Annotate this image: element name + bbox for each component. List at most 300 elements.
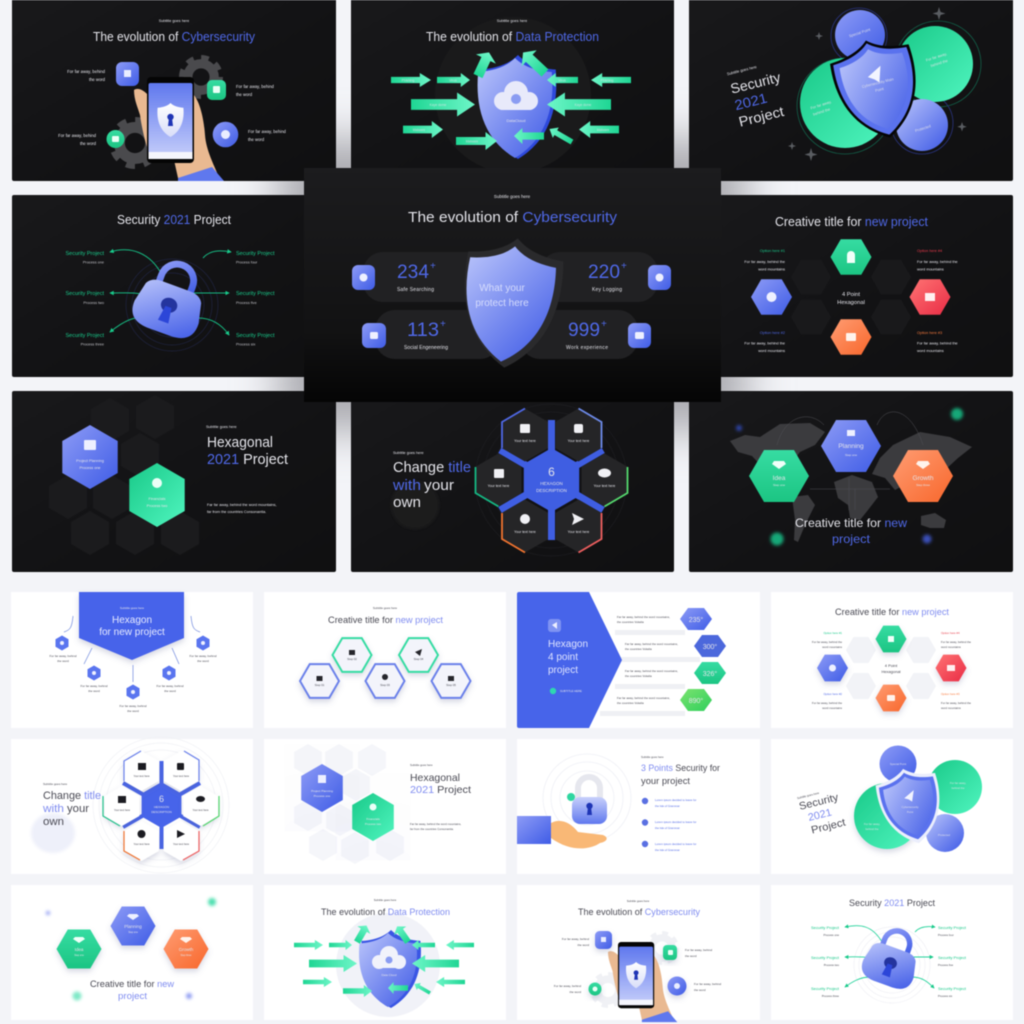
outlined hexagons <box>300 638 470 698</box>
row text: the countries Vokalia <box>625 674 652 678</box>
arrow labels: Malware <box>597 128 609 132</box>
icon: green circle <box>588 982 602 996</box>
stat: social engineering <box>362 319 448 351</box>
subtitle: Subtitle goes here <box>627 899 650 903</box>
bullet text: Lorem ipsum decided to leave for <box>655 798 696 802</box>
hexagon: project planning: Project Planning <box>76 459 104 463</box>
hexagon: idea: Step one <box>773 483 785 487</box>
circle labels: Point <box>875 87 885 93</box>
rotated heading: 2021 <box>807 806 833 824</box>
icon: gears <box>113 58 220 165</box>
center hub <box>500 420 603 540</box>
title: with <box>392 477 421 494</box>
shield <box>478 55 556 159</box>
captions <box>554 937 721 994</box>
title: Change title <box>43 790 101 802</box>
hex: top right: Your text here <box>568 439 589 443</box>
title: 2021 Project <box>207 451 290 468</box>
arrows right <box>388 940 474 994</box>
subtitle: Subtitle goes here <box>206 425 237 429</box>
icon: blue badge <box>595 931 612 949</box>
subtitle: Subtitle goes here <box>641 755 664 759</box>
row text: the countries Vokalia <box>617 701 644 705</box>
hexagon: financials <box>129 463 185 527</box>
labels left: Security Project <box>65 333 104 339</box>
center label: Hexagonal <box>881 669 901 674</box>
hexagon green <box>830 239 872 275</box>
glowing dots <box>736 408 963 546</box>
captions: the word <box>127 709 139 713</box>
option captions: For far away, behind the <box>812 640 842 644</box>
labels left: Security Project <box>65 291 104 297</box>
circle labels: For far away, <box>950 781 966 785</box>
illustration: padlock <box>127 254 216 344</box>
hexagon: planning: Step one <box>845 453 857 457</box>
sublabels left: Process three <box>81 342 104 346</box>
hex: bottom right: Your text here <box>568 530 589 534</box>
option 4: word mountains <box>917 268 944 272</box>
blue arrow panel: project <box>548 665 578 676</box>
title: Hexagonal <box>207 434 273 451</box>
hexagon stat 300 <box>694 635 726 657</box>
center label: 4 Point <box>885 663 898 668</box>
row text: Far far away, behind the word mountains, <box>625 642 678 646</box>
subtitle: Subtitle goes here <box>393 451 424 455</box>
background hexagons <box>294 744 404 864</box>
option 3: Option here #3 <box>917 331 942 335</box>
option 4: For far away, behind the <box>917 260 958 264</box>
hexagon: planning <box>821 420 881 472</box>
panel: dark padlock slide <box>12 195 312 377</box>
panel: light five hexagon row <box>264 592 506 728</box>
title: project <box>832 532 871 546</box>
hexagon stat 300: 300° <box>703 643 717 651</box>
center label: Hexagonal <box>837 300 865 306</box>
green circle right <box>928 760 982 814</box>
blue arrow panel: 4 point <box>548 652 578 663</box>
bullet text: the Isle of Grammar <box>655 826 680 830</box>
title: 3 Points Security for <box>641 763 721 773</box>
blue circle top <box>880 746 916 782</box>
circle labels <box>810 27 948 133</box>
hexagon: idea <box>56 930 102 968</box>
rotated heading: Subtitle goes here <box>727 65 757 76</box>
row text <box>617 615 678 705</box>
icon: green badge <box>207 80 226 100</box>
caption left bottom: For far away, behind <box>58 133 97 138</box>
circle labels: For far away, <box>925 52 947 63</box>
arrows: pointing in from left <box>391 73 497 150</box>
hexagon stat 235: 235° <box>689 616 703 624</box>
hexagon orange <box>830 319 872 355</box>
icon: blue circle <box>668 976 686 996</box>
panel: light six hexagon slide <box>11 737 253 874</box>
option 1: For far away, behind the <box>744 260 785 264</box>
sublabels right: Process four <box>938 933 954 937</box>
central shield <box>873 762 949 850</box>
subtitle: Subtitle goes here <box>159 19 189 23</box>
captions: the word <box>197 659 209 663</box>
icon: smile circle <box>213 122 238 147</box>
labels left <box>65 251 104 339</box>
subtitle: Subtitle goes here <box>497 19 527 23</box>
hexagon labels: Your text here <box>114 808 131 812</box>
center hub: HEXAGON <box>154 805 169 809</box>
center label: 4 Point <box>842 292 860 298</box>
bullet text: Lorem ipsum decided to leave for <box>655 820 696 824</box>
caption left top: For far away, behind <box>67 69 106 74</box>
captions: the word <box>577 943 589 947</box>
rotated heading <box>797 786 847 838</box>
hexagon orange <box>876 685 906 711</box>
circle labels: behind the <box>813 107 831 117</box>
panel: dark 4 point hexagonal slide <box>712 195 1013 377</box>
illustration: hand holding phone <box>134 77 224 181</box>
caption right top: the word <box>236 92 253 97</box>
option 1: Option here #1 <box>760 249 785 253</box>
blue arrow panel: Hexagon <box>548 639 588 650</box>
labels right: Security Project <box>236 333 275 339</box>
blue pentagon header <box>79 592 184 660</box>
body text: far from the countries Consonantia. <box>207 510 266 514</box>
labels right: Security Project <box>236 291 275 297</box>
blue arrow panel: SUBTITLE HERE <box>560 689 582 693</box>
title: The evolution of Cybersecurity <box>408 209 618 226</box>
shield: protect here <box>475 298 529 309</box>
hexagon: project planning <box>301 764 343 812</box>
sublabels left <box>81 260 104 346</box>
labels left: Security Project <box>811 986 840 991</box>
title: your <box>67 803 89 815</box>
hexagon: financials: Financials <box>148 497 166 501</box>
circle labels: For far away, <box>864 822 880 826</box>
icon: cloud with lock <box>372 946 406 969</box>
captions: For far away, behind <box>554 984 581 988</box>
rotated heading: Project <box>737 103 786 130</box>
stat: key logging: + <box>621 261 627 272</box>
green circle left <box>800 58 890 148</box>
caption right bottom: For far away, behind <box>248 129 287 134</box>
hexagon labels: Step 01 <box>315 683 325 687</box>
panel: dark featured slide <box>304 168 721 402</box>
green circle left <box>854 783 920 849</box>
hexagon stat 326: 326° <box>703 670 717 678</box>
panel: dark world map slide <box>689 391 1013 572</box>
subtitle: Subtitle goes here <box>43 782 68 786</box>
sublabels left <box>822 933 839 998</box>
hexagon blue <box>751 279 792 315</box>
hex: bottom left <box>502 500 548 552</box>
arrows diagonal <box>351 922 432 996</box>
arrow labels: Virus <box>449 78 457 82</box>
center hub: DESCRIPTION <box>151 810 172 814</box>
sublabels left: Process two <box>824 963 839 967</box>
arrow labels: Kaye dome <box>430 103 447 107</box>
stat: safe searching: 234 <box>397 262 429 283</box>
panel: dark data protection slide <box>351 0 674 181</box>
arrows left <box>294 940 372 997</box>
circle labels: For far away, <box>810 100 832 110</box>
rotated heading: Project <box>810 816 847 837</box>
blue arrow panel <box>517 592 622 728</box>
title: Hexagonal <box>410 772 460 784</box>
hexagon: idea: Step one <box>74 954 84 957</box>
title: with <box>42 803 64 815</box>
hexagon: project planning: Process one <box>79 466 101 470</box>
sublabels left: Process one <box>83 260 104 264</box>
illustration: padlock <box>567 777 607 824</box>
hexagon: planning: Planning <box>838 443 864 450</box>
panel: dark security circles slide <box>689 0 1013 181</box>
title: Creative title for new <box>90 979 174 989</box>
stat: safe searching: Safe Searching <box>397 287 434 293</box>
hexagon stat 326 <box>694 662 726 684</box>
sublabels right <box>938 933 954 998</box>
circle labels: Cybersecurity Main <box>862 77 894 89</box>
shield: What your <box>479 283 525 294</box>
captions: For far away, behind <box>119 704 147 708</box>
hexagon labels: Your text here <box>192 808 209 812</box>
hex: bottom right <box>556 500 602 552</box>
option captions: word mountains <box>941 645 961 649</box>
row text: Far far away, behind the word mountains, <box>617 615 670 619</box>
circle labels: Protected <box>938 833 950 837</box>
panel: dark hexagonal 2021 slide <box>12 391 336 572</box>
hexagon labels: Your text here <box>133 774 150 778</box>
stat: key logging: Key Logging <box>592 287 622 293</box>
title: own <box>393 494 421 511</box>
stat: work experience: 999 <box>568 320 600 341</box>
hexagon labels: Your text here <box>173 774 190 778</box>
title: own <box>43 816 64 828</box>
title: project <box>118 991 148 1001</box>
circle labels: Special Point <box>849 27 872 38</box>
bullet text <box>655 798 696 852</box>
bullet text: the Isle of Grammar <box>655 804 680 808</box>
hexagon red <box>936 655 966 681</box>
hexagon: idea <box>749 450 809 502</box>
outer hexagons <box>105 751 218 861</box>
stat pills <box>363 252 658 359</box>
central shield <box>826 31 930 147</box>
title: The evolution of Data Protection <box>426 30 599 44</box>
hexagon stat 890 <box>680 689 712 711</box>
sublabels right: Process six <box>236 342 256 346</box>
hexagon labels: Your text here <box>133 842 150 846</box>
hexagon: growth: Growth <box>179 947 194 952</box>
hex: top left <box>502 408 548 462</box>
hexagon stat 890: 890° <box>689 697 703 705</box>
blue pentagon header: for new project <box>99 627 165 638</box>
captions <box>49 654 217 713</box>
panel: light 4 point project <box>517 592 760 728</box>
captions: the word <box>694 988 706 992</box>
row text: Far far away, behind the word mountains, <box>617 696 670 700</box>
circle labels: behind the <box>865 827 879 831</box>
hexagon: financials <box>352 793 394 841</box>
panel: light creative title map slide <box>11 885 253 1020</box>
rotated heading: Subtitle goes here <box>797 791 820 800</box>
labels left: Security Project <box>811 925 840 930</box>
hexagon: planning <box>110 907 156 945</box>
bullet text: the Isle of Grammar <box>655 848 680 852</box>
title: your project <box>641 776 691 786</box>
option 4: Option here #4 <box>917 249 942 253</box>
panel: light 4 point hexagonal <box>771 592 1013 728</box>
label: data cloud: DataCloud <box>507 118 525 123</box>
arrow labels: Kaye dome <box>575 103 592 107</box>
option captions: Option here #1 <box>823 631 842 635</box>
option captions: word mountains <box>822 706 843 710</box>
circle labels: Protected <box>915 124 931 133</box>
hexagon labels: Step 02 <box>347 657 357 661</box>
captions: For far away, behind <box>49 654 77 658</box>
captions: the word <box>569 990 581 994</box>
captions: For far away, behind <box>156 684 184 688</box>
hexagon: financials: Process two <box>365 822 381 826</box>
hexagon icons <box>118 763 205 838</box>
subtitle: Subtitle goes here <box>374 898 397 902</box>
green circle right <box>897 26 973 102</box>
hexagon accents <box>103 751 219 860</box>
center hub: 6 <box>548 465 555 479</box>
labels left: Security Project <box>811 955 840 960</box>
arrow labels <box>402 78 613 144</box>
hex: right <box>582 454 628 506</box>
center hub: HEXAGON <box>540 481 563 486</box>
title: The evolution of Data Protection <box>321 907 450 917</box>
option 2: Option here #2 <box>760 331 785 335</box>
arrow labels: Phishing <box>402 78 414 82</box>
circle labels: Cybersecurity <box>901 805 919 809</box>
captions: For far away, behind <box>562 937 589 941</box>
sublabels right: Process five <box>236 301 257 305</box>
icon: green badge <box>663 945 677 960</box>
panel: light phone slide <box>517 885 760 1022</box>
title: Change title <box>393 459 472 476</box>
blue circle bottom <box>896 99 948 151</box>
panel: light 3 points security <box>517 739 760 874</box>
rings <box>543 754 631 842</box>
arrow labels: Phishing <box>601 78 613 82</box>
labels left: Security Project <box>65 251 104 257</box>
option 3: For far away, behind the <box>917 342 958 346</box>
stat: key logging <box>588 261 671 293</box>
labels right: Security Project <box>938 986 967 991</box>
circle labels: behind the <box>930 59 948 68</box>
hexagon labels: Step 04 <box>414 657 424 661</box>
title: Security 2021 Project <box>117 213 231 227</box>
sonar rings <box>854 927 930 1003</box>
caption left top: the word <box>89 77 106 82</box>
arrow labels: Virus <box>558 78 566 82</box>
stat: safe searching <box>352 261 436 293</box>
rotated heading: Security <box>729 69 782 97</box>
labels right <box>236 251 275 339</box>
hexagon: growth <box>164 930 208 968</box>
title: your <box>424 477 454 494</box>
subtitle: Subtitle goes here <box>494 194 531 199</box>
hexagon: planning: Planning <box>124 924 142 929</box>
hexagon: financials: Financials <box>366 817 380 821</box>
option captions: Option here #3 <box>941 692 960 696</box>
hexagon: growth: Step three <box>180 954 192 957</box>
captions: the word <box>88 689 100 693</box>
sonar rings <box>126 259 218 351</box>
arrows: pointing in from right <box>514 73 631 144</box>
arrow labels: Malware <box>466 140 478 144</box>
icon: gears <box>593 933 677 1005</box>
title: Creative title for new project <box>775 215 929 229</box>
panel: light hexagonal 2021 <box>264 739 506 874</box>
captions: For far away, behind <box>80 684 108 688</box>
icon: cloud with lock <box>494 81 538 110</box>
body text: Far far away, behind the word mountains, <box>410 822 461 826</box>
sublabels right: Process four <box>236 260 258 264</box>
small hexagons <box>56 636 209 700</box>
hexagon red <box>910 279 950 315</box>
circle labels: behind the <box>951 786 965 790</box>
subtitle: Subtitle goes here <box>410 763 433 767</box>
world map <box>730 423 972 542</box>
sublabels right <box>236 260 258 346</box>
label: data cloud: Data Cloud <box>381 973 397 977</box>
option captions <box>812 631 971 710</box>
hexagon: idea: Idea <box>773 475 786 482</box>
background hexagons <box>846 637 936 699</box>
outline arcs <box>797 8 981 154</box>
hexagon labels: Your text here <box>173 842 190 846</box>
caption right top: For far away, behind <box>236 84 275 89</box>
option captions: Option here #2 <box>823 692 842 696</box>
bullet text: Lorem ipsum decided to leave for <box>655 842 696 846</box>
illustration: open hand <box>517 816 607 848</box>
title: Creative title for new project <box>835 607 950 617</box>
title: Creative title for new project <box>328 615 444 625</box>
illustration: padlock <box>858 923 927 993</box>
circle labels: Special Point <box>890 762 906 766</box>
hex: right: Your text here <box>594 484 615 488</box>
caption right bottom: the word <box>248 137 265 142</box>
row text: the countries Vokalia <box>617 620 644 624</box>
sparkle decorations <box>788 7 967 161</box>
option 2: For far away, behind the <box>744 342 785 346</box>
icon: green thumb circle <box>106 130 124 148</box>
arrows from lock <box>110 250 231 335</box>
hex: top left: Your text here <box>514 439 536 443</box>
sublabels right: Process six <box>938 994 953 998</box>
labels right: Security Project <box>236 251 275 257</box>
hexagon icons <box>316 649 454 681</box>
labels right: Security Project <box>938 955 967 960</box>
sublabels left: Process three <box>822 994 839 998</box>
circle labels: Point <box>907 810 913 814</box>
shield <box>359 930 421 1008</box>
shield <box>456 233 566 373</box>
option captions: word mountains <box>822 645 843 649</box>
panel: light padlock slide <box>771 885 1013 1020</box>
body text: Far far away, behind the word mountains, <box>207 503 277 507</box>
hexagon: growth <box>893 450 953 502</box>
row text: Far far away, behind the word mountains, <box>625 669 678 673</box>
labels left <box>811 925 840 991</box>
option captions: For far away, behind the <box>812 701 842 705</box>
hexagon: project planning: Project Planning <box>311 789 333 793</box>
title: Creative title for new <box>795 516 906 530</box>
labels right: Security Project <box>938 925 967 930</box>
blue circle top <box>835 10 885 60</box>
rings <box>93 737 229 873</box>
